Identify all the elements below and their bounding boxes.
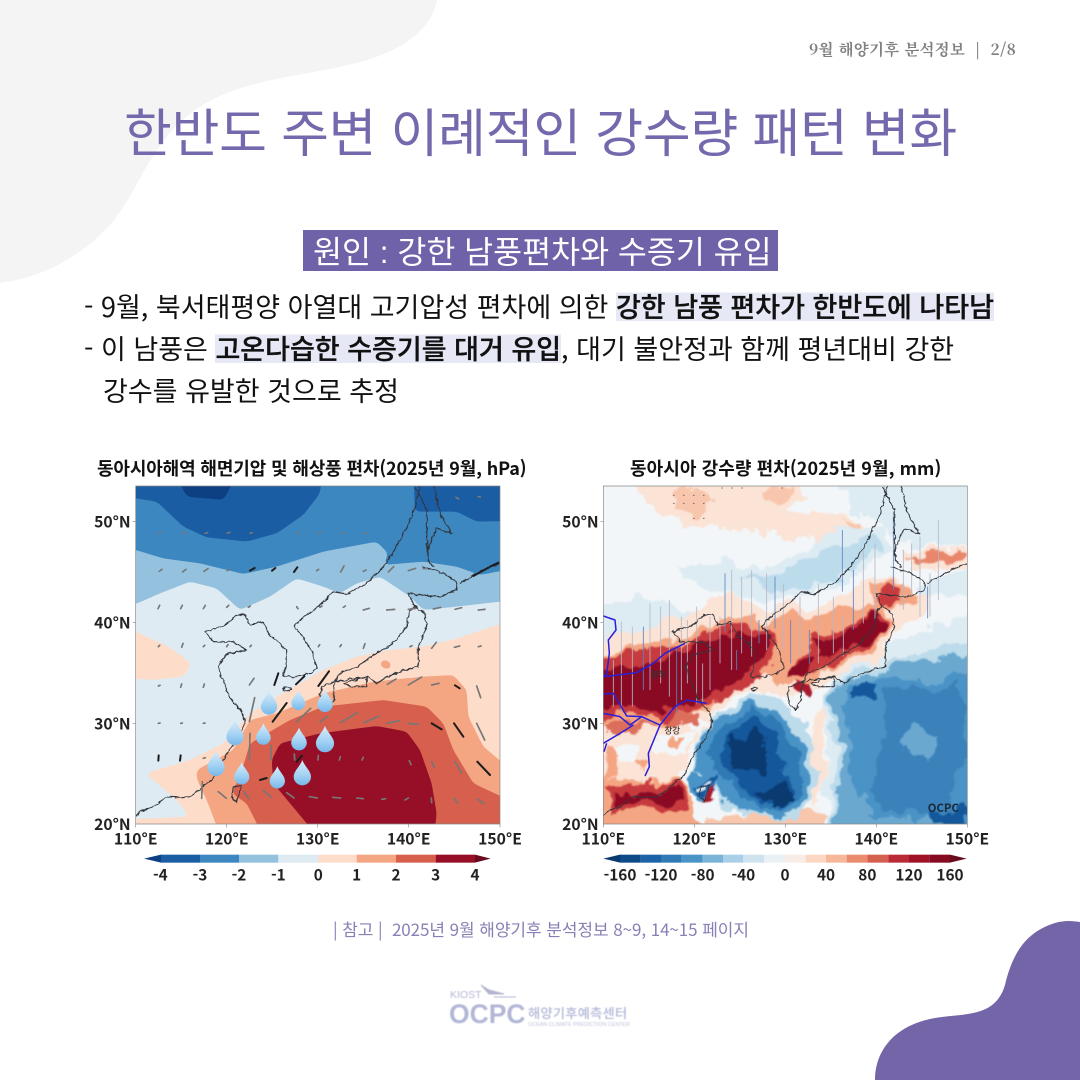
title: 한반도 주변 이례적인 강수량 패턴 변화	[124, 92, 957, 167]
map frame	[600, 486, 967, 827]
x axis labels: 120°E	[672, 826, 716, 849]
colorbar: -40	[731, 863, 755, 885]
x axis labels: 150°E	[478, 826, 522, 849]
blob: bottom-right purple shape	[875, 921, 1080, 1080]
chart: precipitation anomaly map	[562, 486, 989, 885]
subtitle banner	[303, 230, 778, 271]
logo: wordmark: OCPC	[449, 999, 526, 1029]
map frame	[133, 486, 500, 827]
x axis labels: 140°E	[854, 826, 898, 849]
colorbar: 1	[352, 863, 361, 885]
colorbar: 40	[817, 863, 835, 885]
x axis labels	[114, 826, 522, 849]
y axis labels	[562, 509, 599, 835]
y axis labels: 40°N	[562, 610, 599, 633]
bullet text block	[84, 286, 994, 409]
logo: swoosh mark	[480, 984, 516, 998]
colorbar	[603, 855, 967, 885]
colorbar: 4	[470, 863, 480, 885]
colorbar: 3	[431, 863, 440, 885]
y axis labels: 30°N	[94, 711, 131, 734]
y axis labels: 40°N	[94, 610, 131, 633]
subtitle text: 원인 : 강한 남풍편차와 수증기 유입	[313, 227, 772, 273]
colorbar: 160	[936, 863, 964, 885]
wind vectors: black	[158, 563, 498, 780]
rivers	[603, 616, 707, 776]
x axis labels: 140°E	[387, 826, 431, 849]
x axis labels	[581, 826, 989, 849]
colorbar: -3	[193, 863, 207, 885]
logo: KIOST OCPC	[449, 984, 630, 1029]
coastlines	[603, 483, 968, 817]
logo: Korean name: 해양기후예측센터	[528, 1003, 627, 1022]
bullet line 1: - 9월, 북서태평양 아열대 고기압성 편차에 의한 강한 남풍 편차가 한반도에 나타남	[84, 286, 994, 325]
x axis labels: 110°E	[581, 826, 625, 849]
x axis labels: 130°E	[763, 826, 807, 849]
reference note: | 참고 | 2025년 9월 해양기후 분석정보 8~9, 14~15 페이지	[333, 916, 749, 941]
significance vertical lines	[613, 517, 938, 713]
chart title: left: 동아시아해역 해면기압 및 해상풍 편차(2025년 9월, hPa)	[97, 455, 526, 481]
chart: sea level pressure and wind anomaly map	[94, 486, 522, 885]
river label: Yellow River: 황하	[651, 668, 666, 680]
x axis labels: 110°E	[114, 826, 158, 849]
colorbar: -1	[271, 863, 286, 885]
colorbar: 2	[391, 863, 401, 885]
logo: English name: OCEAN CLIMATE PREDICTION CENTER	[528, 1022, 630, 1028]
x axis labels: 120°E	[205, 826, 249, 849]
blob: top-left grey background shape	[0, 0, 437, 283]
y axis labels: 50°N	[562, 509, 599, 532]
x axis labels: 150°E	[945, 826, 989, 849]
logo: KIOST mark: KIOST	[450, 989, 482, 1001]
colorbar: -120	[645, 863, 677, 885]
x axis labels: 130°E	[296, 826, 340, 849]
y axis labels: 20°N	[562, 812, 599, 835]
wind vectors: grey	[158, 497, 485, 804]
colorbar: 80	[858, 863, 876, 885]
y axis labels: 30°N	[562, 711, 599, 734]
coastlines	[136, 483, 500, 817]
colorbar: -2	[232, 863, 246, 885]
river label: Yangtze: 장강	[665, 724, 680, 736]
colorbar: -80	[691, 863, 715, 885]
bullet line 2: - 이 남풍은 고온다습한 수증기를 대거 유입, 대기 불안정과 함께 평년대비 강한	[84, 328, 954, 367]
pressure contours	[136, 486, 500, 824]
raindrops	[207, 689, 334, 788]
colorbar: 0	[314, 863, 323, 885]
bullet line 3: 강수를 유발한 것으로 추정	[103, 370, 399, 409]
chart title: right: 동아시아 강수량 편차(2025년 9월, mm)	[630, 455, 941, 481]
y axis labels	[94, 509, 131, 835]
header: page label: 9월 해양기후 분석정보 | 2/8	[809, 38, 1016, 60]
y axis labels: 20°N	[94, 812, 131, 835]
stippling	[673, 488, 785, 518]
precipitation contours	[604, 486, 967, 824]
y axis labels: 50°N	[94, 509, 131, 532]
colorbar: 120	[895, 863, 923, 885]
colorbar: 0	[780, 863, 790, 885]
colorbar: -160	[604, 863, 636, 885]
colorbar: -4	[153, 863, 168, 885]
OCPC mark: OCPC	[928, 800, 959, 816]
colorbar	[144, 855, 491, 885]
